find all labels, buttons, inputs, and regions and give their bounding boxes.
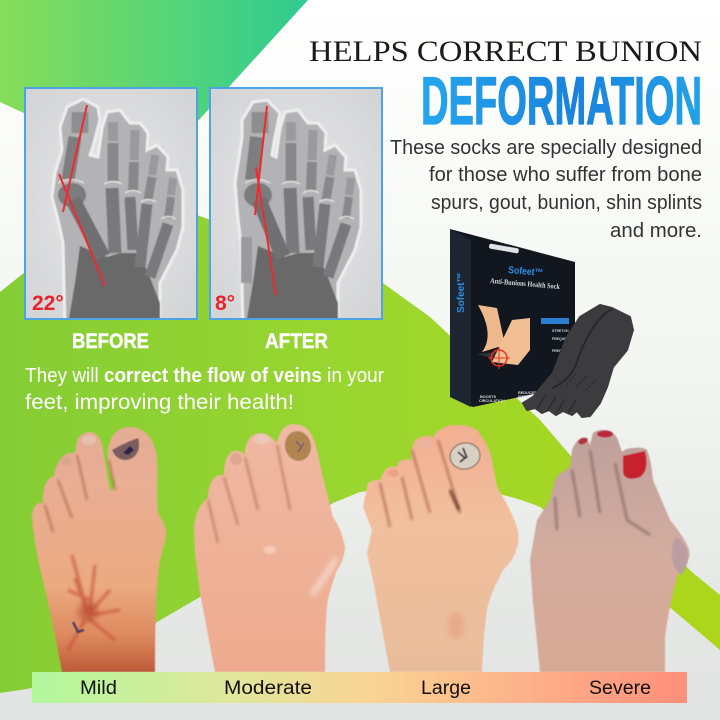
toenail big toe [112,438,139,460]
foot: moderate [194,424,345,672]
title: HELPS CORRECT BUNION [309,35,702,68]
toe creases [555,450,650,535]
intro text block: spurs, gout, bunion, shin splints [431,192,702,214]
toenail big toe [448,441,482,471]
intro text block: and more. [610,220,702,242]
top green wave [0,0,308,142]
white caption: They will correct the flow of veins in your [25,365,384,387]
lower green wave [0,215,720,693]
after label: AFTER [265,330,328,353]
red alignment lines [255,106,276,295]
label moderate: Moderate [224,678,312,699]
sock box: SWELLING [518,395,538,399]
rash [68,555,120,650]
label mild: Mild [80,678,117,699]
intro text block [390,137,702,242]
before label: BEFORE [72,330,149,353]
black socks [523,305,633,417]
toe creases [208,445,290,543]
sock box: REDUCES [518,391,537,395]
label severe: Severe [589,678,651,699]
sock box [450,229,575,407]
panel: before x-ray [25,88,197,330]
toe creases [380,440,460,527]
angle label: 8° [215,292,235,315]
sock box: Sofeet™ [456,272,467,313]
sock box: Anti-Bunions Health Sock [490,276,561,291]
severity bar [32,672,687,703]
angle label: 22° [32,292,64,315]
toenail big toe [282,429,314,463]
red alignment lines [59,105,105,286]
label large: Large [421,678,471,699]
foot: mild [32,427,166,672]
foot: large [363,425,518,672]
product: sock box and socks [450,229,633,417]
intro text block: These socks are specially designed [390,137,702,159]
toe creases [45,455,115,532]
panel: after x-ray [210,88,382,330]
sock box: FREQUENT [552,349,572,353]
big toe bones after [244,112,283,257]
foot: severe [530,430,690,672]
title [309,35,702,139]
sock box: BOOSTS [480,395,497,399]
surgical plate shadow [241,237,252,283]
toenails red [623,451,646,479]
sock box: FREQUENT [552,337,572,341]
big toe bones before [58,112,103,257]
white caption [25,365,384,414]
sock box: Sofeet™ [508,265,544,279]
sock box: CIRCULATION [479,399,505,403]
intro text block: for those who suffer from bone [429,164,702,186]
sock box: STRETCH [552,329,569,333]
white caption: feet, improving their health! [25,391,294,414]
